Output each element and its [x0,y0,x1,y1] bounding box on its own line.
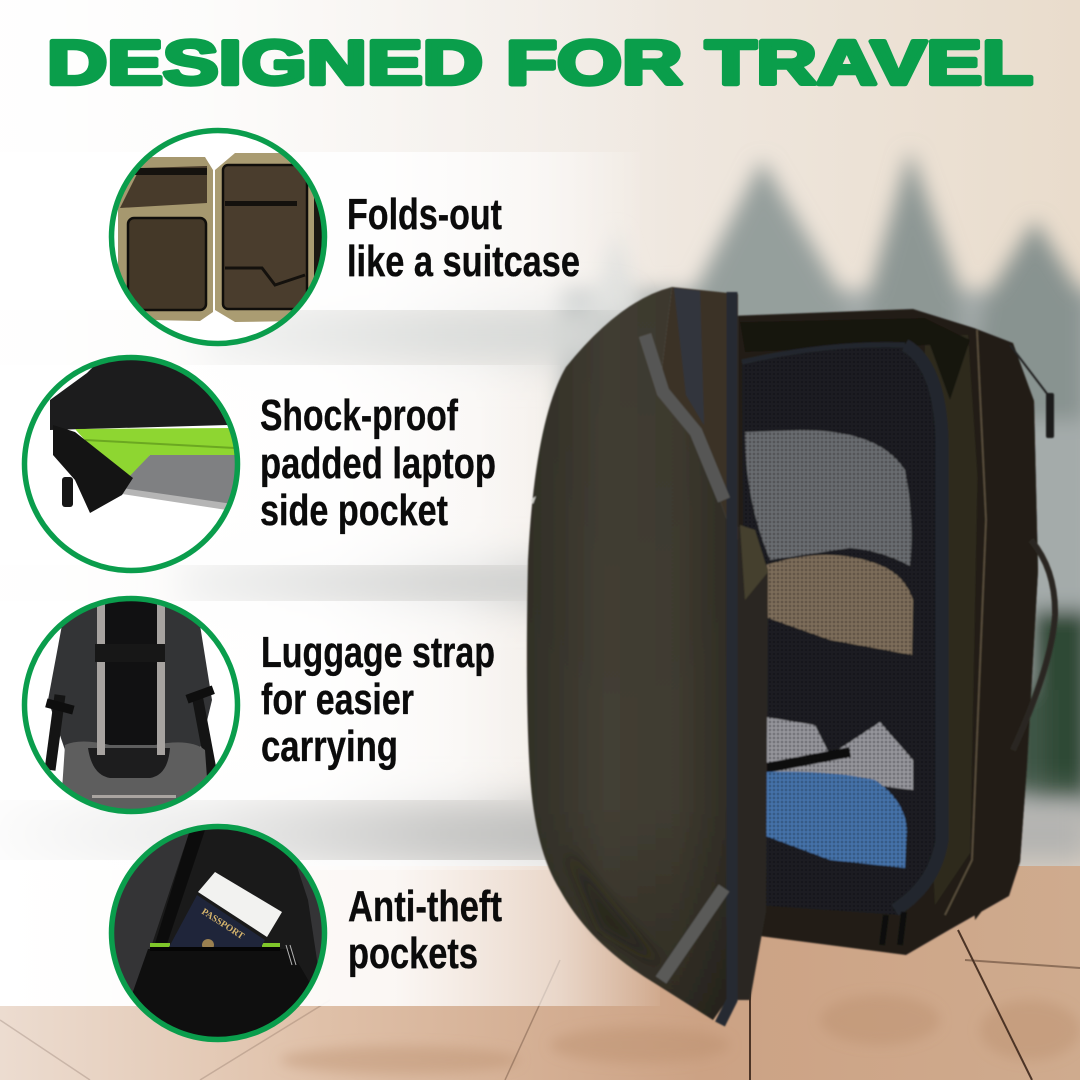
mesh top [50,355,228,430]
shoulder strap left [50,695,60,770]
laptop [126,455,235,504]
zip tag [62,477,73,507]
icon: luggage strap ring [24,598,238,812]
olive inner lining [925,335,979,905]
text: luggage strap: Luggage strap [261,628,495,677]
text: luggage strap [261,628,495,771]
suitcase [62,742,207,809]
flap front [527,287,727,1020]
panel: laptop pocket strip [0,365,560,565]
passport [168,895,265,949]
folded clothes: tan [766,555,913,655]
top compartment binding [742,345,905,362]
backpack body [48,598,212,750]
icon: anti-theft ring [112,826,324,1040]
lower left pocket [128,218,206,310]
left case half [118,157,213,321]
passport label: PASSPORT [199,907,246,942]
compartment binding [895,345,942,910]
black flap [53,425,133,513]
text: anti-theft: pockets [348,929,478,978]
gusset olive patch [740,525,768,600]
flap fold shadow [566,850,660,965]
logo hint [531,496,536,504]
zipper edge [720,292,732,1024]
buckles [45,699,75,714]
zipper pulls [882,912,904,945]
upper left pocket [120,166,207,208]
lime zipper slits [150,943,170,947]
text: anti-theft: Anti-theft [348,882,502,931]
flap top strap [645,335,724,500]
right pocket [223,165,307,309]
text: laptop pocket [260,391,496,535]
suitcase recess [88,748,170,778]
icon: laptop pocket ring [24,358,238,570]
top inner lining [740,318,970,400]
flap upper side panel [660,287,738,540]
side handle [1013,540,1055,750]
trolley rails [97,600,105,755]
text: folds-out [347,190,580,286]
back panel [105,601,157,745]
shoulder strap right [197,695,212,775]
zip pull [286,945,296,965]
black strap across clothes [766,752,850,768]
shoulder sides [114,834,189,992]
lime lining [75,428,234,476]
title: DESIGNED FOR TRAVEL [47,29,1033,98]
flap upper zipper band [674,288,704,425]
folded clothes: gray [745,430,912,566]
flap shading [527,287,727,1020]
panel: folds-out strip [0,152,640,310]
text: laptop pocket: Shock-proof [260,391,458,440]
icon: luggage strap photo [45,601,216,809]
side mesh panel [970,340,1038,920]
panel: anti-theft strip [0,860,660,1006]
folded clothes: blue [763,772,907,868]
zipper seam [945,330,986,915]
text: folds-out: like a suitcase [347,237,580,286]
pocket front [133,949,309,1036]
mesh compartment [742,345,948,915]
passport crest [202,939,214,947]
mesh overlay [742,345,948,915]
top right zip pull [1010,345,1054,438]
text: luggage strap: carrying [261,722,398,771]
flap bottom strap [661,888,724,980]
icon: folds-out case photo [118,153,322,340]
main bag body [730,309,1038,955]
icon: laptop side pocket photo [50,360,235,513]
panel: luggage strap strip [0,601,535,800]
icon: anti-theft pocket photo [114,829,322,1037]
icon: folds-out ring [112,130,324,344]
text: laptop pocket: padded laptop [260,439,496,488]
text: luggage strap: for easier [261,675,414,724]
folded clothes: light [766,717,913,790]
pass-through strap [95,644,165,662]
right case half [215,153,322,322]
backpack photo [527,287,1055,1024]
ticket [198,872,282,937]
text: laptop pocket: side pocket [260,486,448,535]
text: anti-theft [348,882,502,978]
gusset [730,525,768,1000]
text: folds-out: Folds-out [347,190,502,239]
